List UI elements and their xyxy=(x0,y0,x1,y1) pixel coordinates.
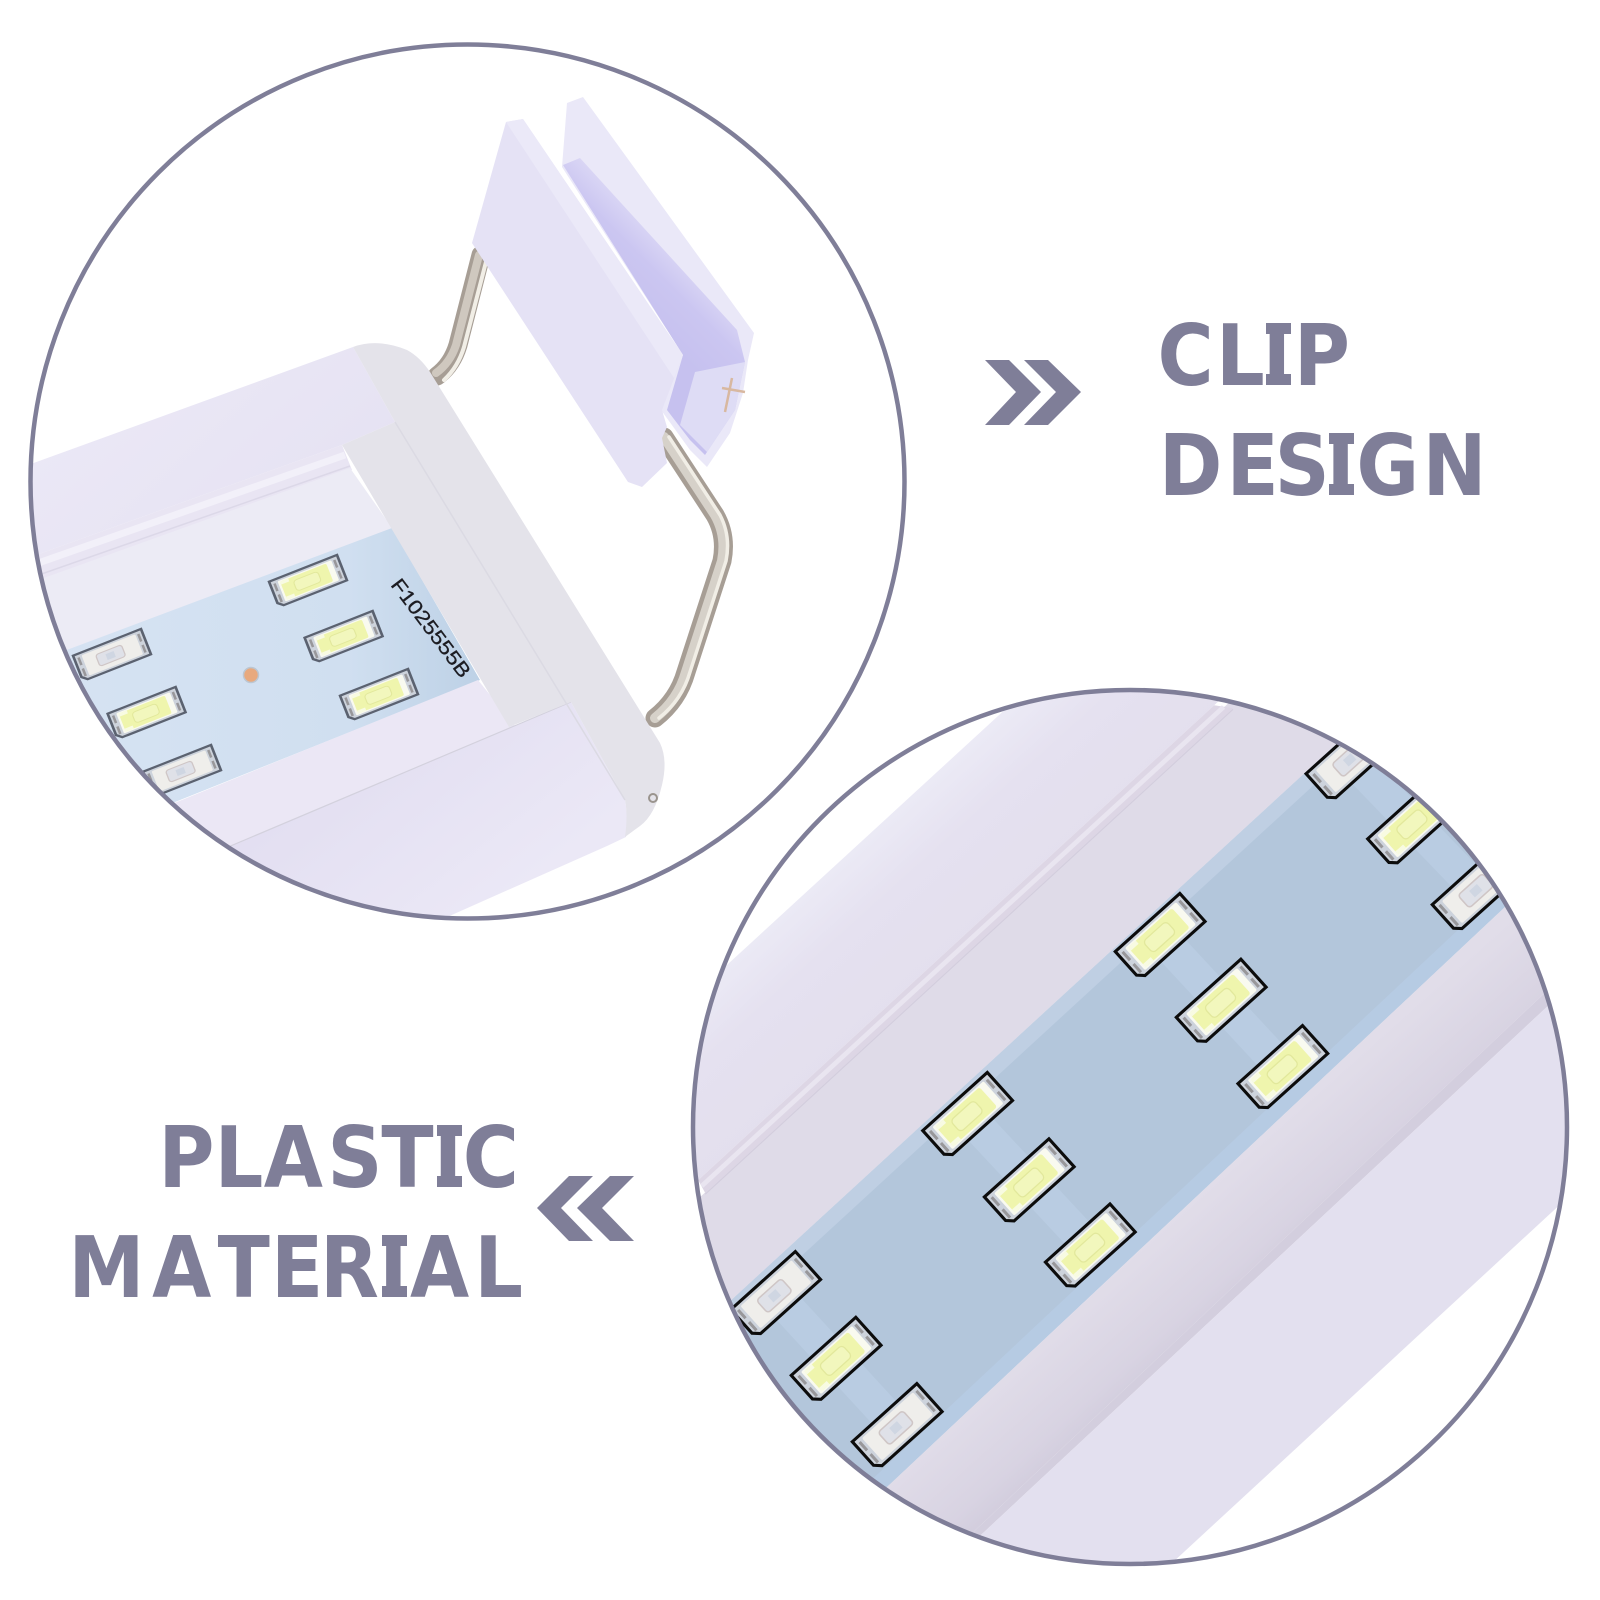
outer lower plastic bar xyxy=(981,1006,1565,1562)
panel: clip design photo xyxy=(20,44,904,960)
LED module row A xyxy=(1115,893,1328,1112)
end cap xyxy=(342,343,665,837)
circle ring xyxy=(693,690,1567,1564)
LED module 6 xyxy=(143,745,221,797)
heading: clip design: CLIP xyxy=(1157,307,1350,406)
LED module 3 xyxy=(340,669,418,721)
LED module row C xyxy=(731,1252,942,1470)
arrow: double chevron left xyxy=(537,1176,634,1241)
LED module 1 xyxy=(269,555,347,607)
arrow: double chevron right xyxy=(985,360,1081,425)
metal wire: upper clip arm xyxy=(436,255,487,380)
LED module row D xyxy=(1306,716,1522,933)
clip front plate xyxy=(472,119,683,487)
LED module row B xyxy=(923,1072,1135,1290)
wire tip xyxy=(649,794,657,802)
heading: clip design xyxy=(1157,307,1487,516)
lower inner wall xyxy=(175,680,514,846)
blue circuit board xyxy=(731,744,1505,1488)
light housing: channel groove xyxy=(25,445,352,583)
orange indicator dot xyxy=(244,668,258,682)
lower groove xyxy=(973,994,1548,1536)
top groove xyxy=(698,705,1233,1194)
light housing: top bar xyxy=(20,347,395,559)
heading: plastic material: MATERIAL xyxy=(68,1219,523,1318)
outer lower bar xyxy=(230,702,626,916)
upper inner wall xyxy=(701,704,1336,1300)
heading: clip design: DESIGN xyxy=(1159,417,1487,516)
metal wire: lower clip arm xyxy=(655,437,728,718)
heading: plastic material xyxy=(68,1109,523,1318)
LED module 4 xyxy=(73,629,151,681)
light housing: inner wall xyxy=(44,470,391,650)
LED circuit board xyxy=(67,528,480,802)
outer top plastic bar xyxy=(695,692,1218,1180)
board serial number: F1025555B xyxy=(386,575,475,682)
clip back plate xyxy=(562,97,754,467)
LED module 2 xyxy=(305,611,383,663)
panel: plastic material photo xyxy=(690,688,1570,1566)
lower inner wall xyxy=(887,907,1544,1532)
heading: plastic material: PLASTIC xyxy=(158,1109,519,1208)
LED module 5 xyxy=(108,687,186,739)
circle ring xyxy=(30,44,904,918)
